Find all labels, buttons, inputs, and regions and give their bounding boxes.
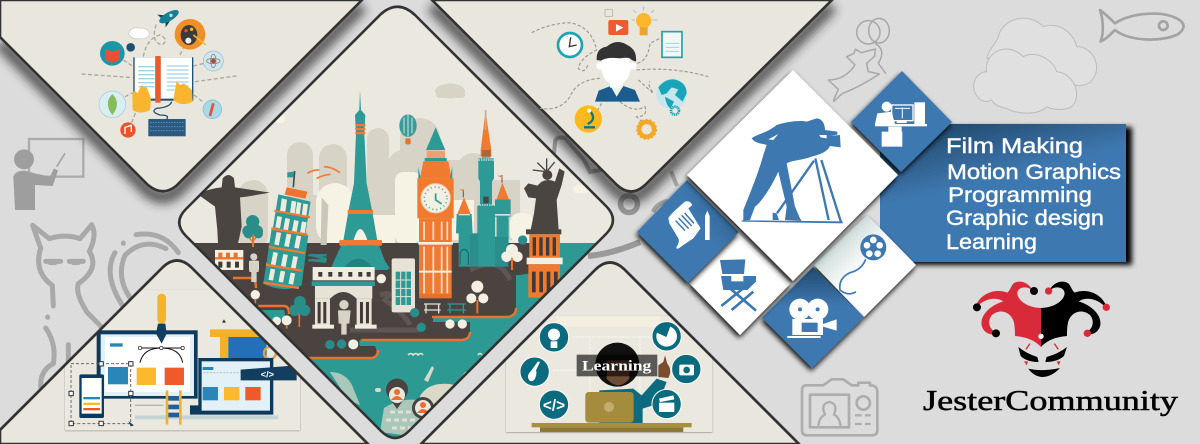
tile: cameraman [687, 70, 898, 281]
doodle: gutter shapes [553, 138, 677, 256]
tree and person beside tower [252, 224, 259, 234]
map land [330, 366, 466, 435]
tile: film reel [814, 215, 916, 317]
doodle: cat outline [33, 225, 178, 387]
sea waves [408, 354, 482, 355]
text: programming: Programming [948, 184, 1092, 207]
birds [307, 167, 340, 178]
panel: services list [880, 124, 1126, 262]
landmark: Eiffel tower [330, 90, 388, 270]
illustration: student with laptop: </> [543, 398, 565, 415]
cream clouds [275, 115, 590, 245]
panel: person with ideas [432, 0, 832, 192]
doodle: fish [1100, 10, 1184, 41]
icon: book with orbiting icons [82, 7, 238, 138]
orange shoreline [233, 278, 516, 358]
logo: jester [973, 282, 1110, 377]
illustration: student with laptop: Learning [582, 358, 652, 374]
doodle: presenter at board [13, 139, 83, 210]
icon: cameraman silhouette [742, 118, 843, 223]
tile: script and pencil [637, 180, 739, 283]
landmark: triumphal arch [312, 240, 390, 335]
landmark: phone box [392, 258, 488, 332]
stacked figure [321, 197, 328, 245]
text: film making: Film Making [946, 135, 1083, 158]
tile: computer operator [851, 71, 952, 172]
text: motion graphics: Motion Graphics [947, 161, 1121, 184]
illustration: student with laptop [506, 316, 712, 432]
tile: director chair [689, 233, 791, 335]
landmark: Big Ben [417, 127, 454, 298]
skyline silhouettes [238, 84, 520, 254]
doodle: camera outline [802, 379, 877, 435]
panel: web design [0, 260, 368, 444]
sea [311, 243, 596, 437]
map pins [386, 379, 434, 419]
tile: movie camera [762, 267, 864, 368]
landmark: hot air balloon [399, 114, 417, 144]
text: graphic design: Graphic design [946, 207, 1104, 230]
illustration: responsive website mockup [65, 290, 300, 430]
text: learning: Learning [946, 231, 1037, 254]
landmark: Christ statue [197, 167, 340, 271]
landmark: castle [456, 110, 527, 270]
ground [170, 243, 560, 357]
tree [246, 215, 260, 226]
doodle: cloud [974, 18, 1097, 113]
panel: learning [421, 262, 799, 444]
doodle: balloon dog [828, 18, 889, 102]
landmark: Statue of Liberty [524, 158, 565, 298]
icon: person with floating icons [532, 7, 708, 139]
text: brand name: JesterCommunity [923, 385, 1179, 417]
panel: world landmarks [170, 7, 630, 444]
landmark: leaning tower [266, 171, 311, 270]
illustration: responsive website mockup: </> [261, 369, 275, 379]
icon: jester hat and face [973, 282, 1110, 377]
panel: book learning [0, 0, 362, 191]
